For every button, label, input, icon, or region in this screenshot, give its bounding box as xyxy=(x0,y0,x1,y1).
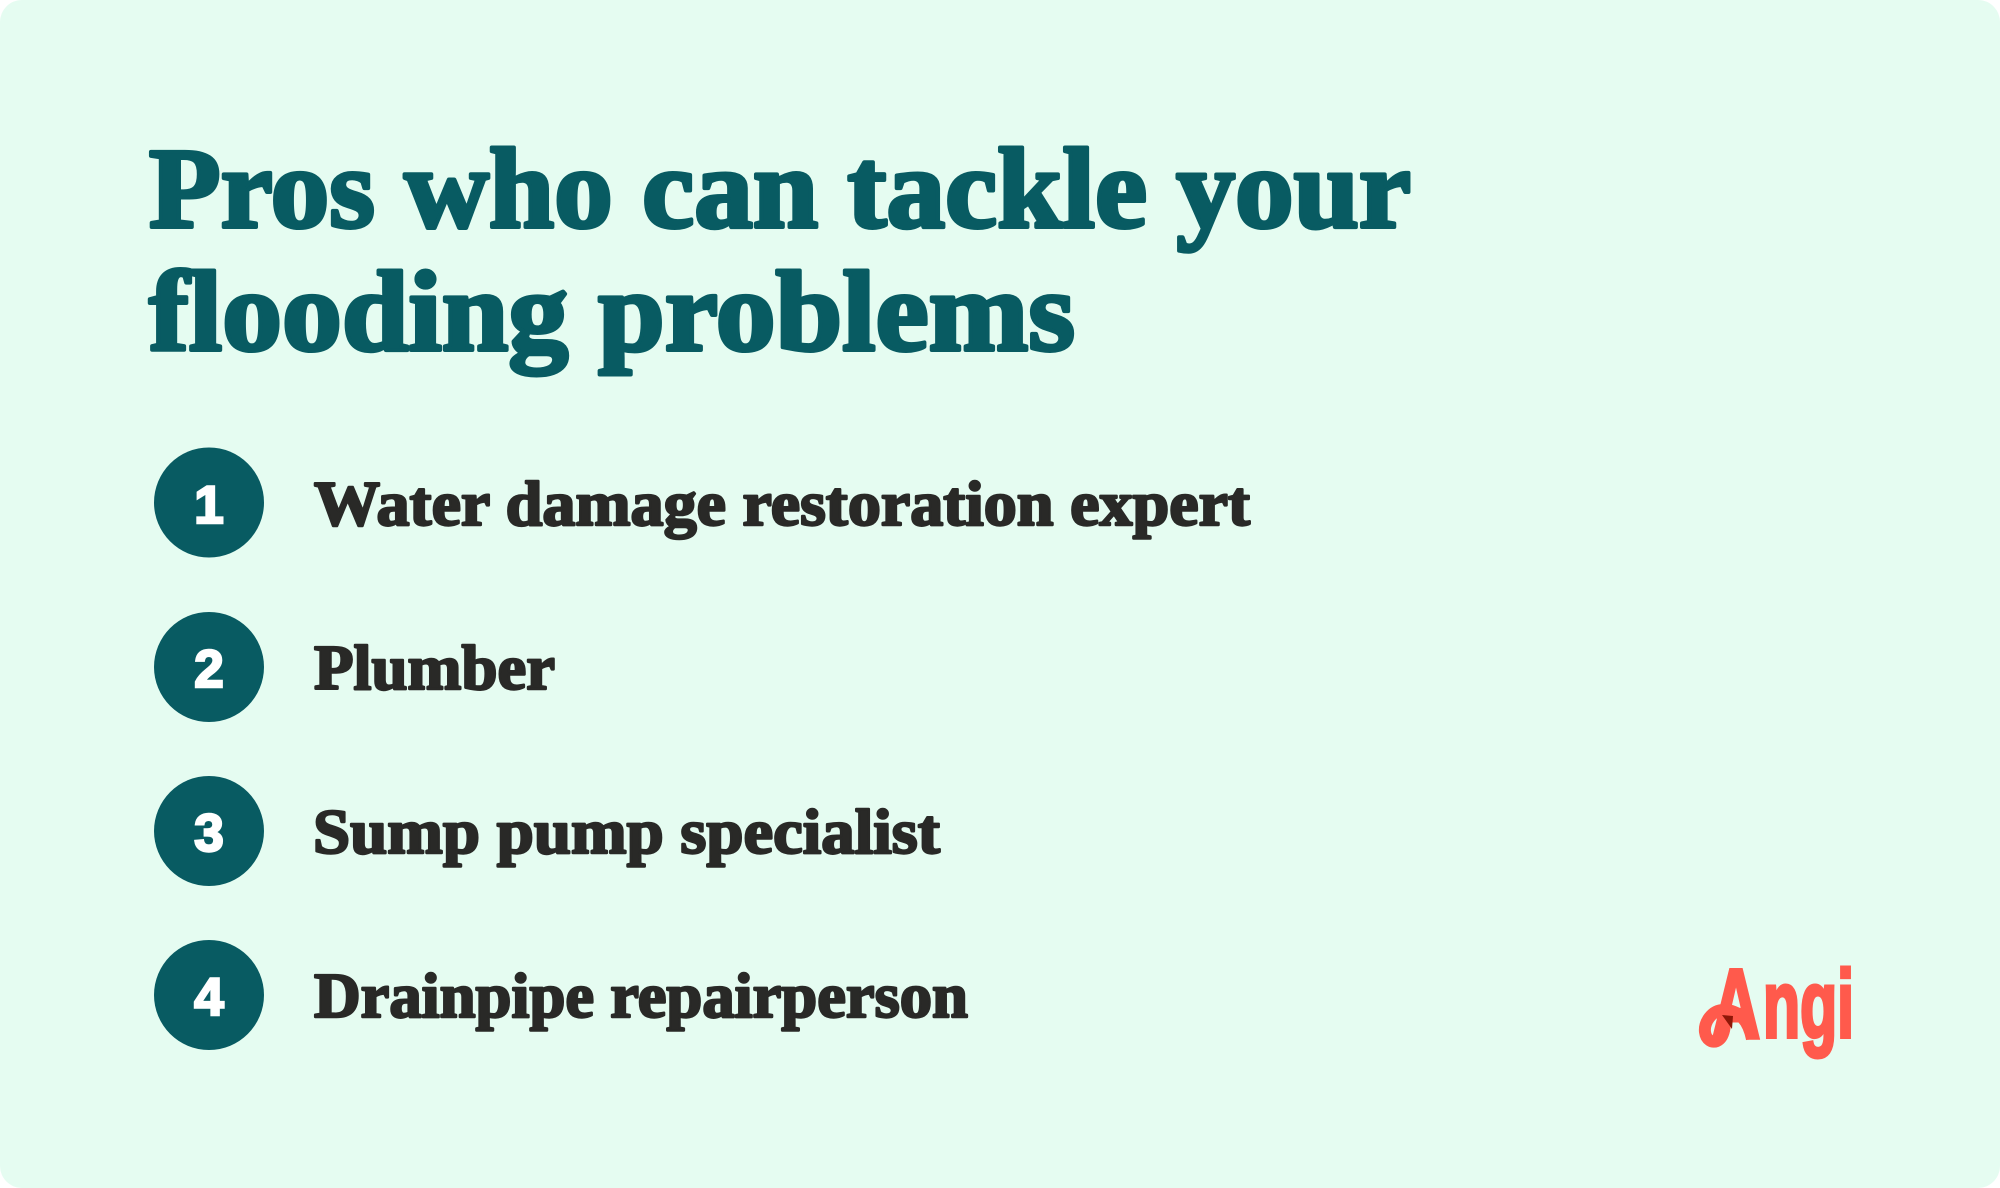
list item 2: plumber: 2 xyxy=(194,640,224,699)
list item 4: drainpipe repairperson xyxy=(154,940,968,1050)
list item 3: sump pump specialist: Sump pump specialist xyxy=(313,796,941,867)
title xyxy=(149,125,1411,375)
list item 1: water damage restoration expert: Water damage restoration expert xyxy=(314,468,1251,539)
list item 3: sump pump specialist xyxy=(154,776,941,886)
logo: Angi xyxy=(1705,949,1854,1059)
list item 3: sump pump specialist: 3 xyxy=(194,804,224,863)
title: flooding problems xyxy=(149,248,1075,375)
list item 2: plumber: Plumber xyxy=(314,632,555,703)
list item 4: drainpipe repairperson: 4 xyxy=(194,968,224,1027)
logo: Angi: ngi xyxy=(1763,951,1854,1058)
list item 2: plumber xyxy=(154,612,555,722)
title: Pros who can tackle your xyxy=(149,125,1411,252)
list item 1: water damage restoration expert xyxy=(154,448,1251,558)
list item 1: water damage restoration expert: 1 xyxy=(194,476,224,535)
list item 4: drainpipe repairperson: Drainpipe repairperson xyxy=(314,960,968,1031)
logo: Angi: A xyxy=(1712,949,1760,1059)
